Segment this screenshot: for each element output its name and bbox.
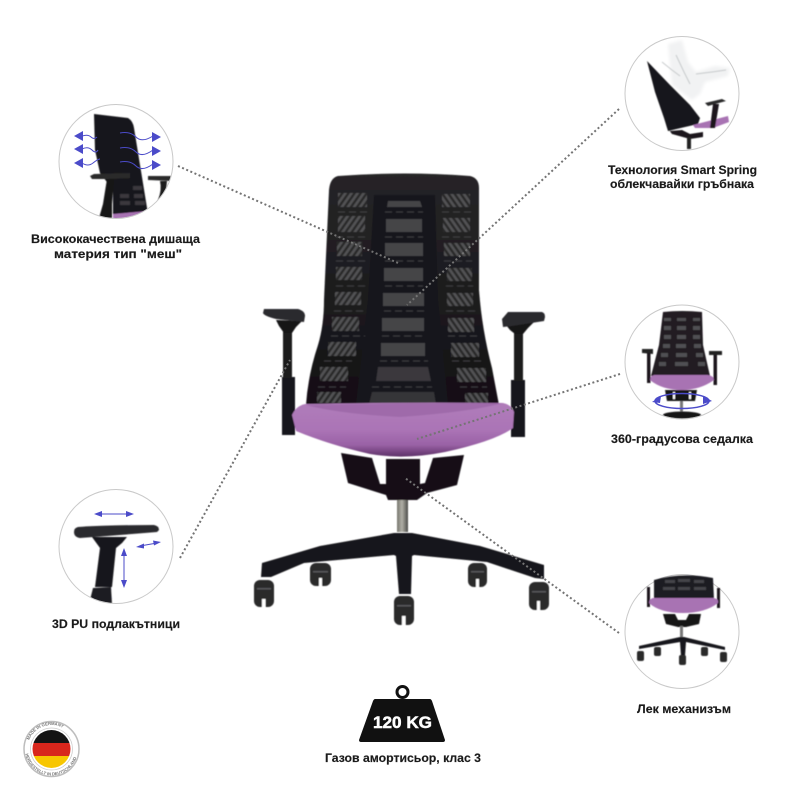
German flag xyxy=(32,730,71,768)
icon: weight xyxy=(359,686,445,742)
caption: Лек механизъм xyxy=(637,702,731,716)
badge text: MADE IN GERMANY xyxy=(26,722,64,740)
caption: Технология Smart Spring xyxy=(608,163,757,177)
leader: smart spring xyxy=(407,109,619,305)
dotted leader lines xyxy=(178,109,620,633)
star base xyxy=(261,533,544,594)
caption: 360-градусова седалка xyxy=(611,432,753,446)
backrest shell xyxy=(306,174,499,405)
chair base xyxy=(254,500,549,625)
adjustment arrows xyxy=(94,511,161,588)
right arm stem xyxy=(514,327,523,381)
right arm pad xyxy=(502,312,545,327)
circle frame xyxy=(59,104,173,218)
weight capacity xyxy=(325,686,481,765)
dark spine xyxy=(356,195,448,404)
caption: Висококачествена дишаща xyxy=(31,232,200,246)
caption xyxy=(608,163,757,191)
badge ring xyxy=(24,722,79,776)
main chair xyxy=(254,174,549,625)
mesh backrest xyxy=(306,174,499,405)
circle frame xyxy=(59,490,173,604)
caster slots xyxy=(262,578,540,625)
rotation arrow xyxy=(652,394,712,408)
panel: 3D armrests xyxy=(52,490,180,631)
caption: облекчавайки гръбнака xyxy=(610,177,754,191)
seat mechanism xyxy=(341,453,464,500)
left arm stem xyxy=(283,325,292,378)
caption: материя тип "меш" xyxy=(54,247,182,261)
mesh center windows xyxy=(369,201,436,404)
left arm pad xyxy=(263,309,305,322)
circle frame xyxy=(625,305,739,419)
leader: armrests xyxy=(180,360,290,558)
chair base illustration xyxy=(637,575,727,665)
caster highlights xyxy=(257,571,546,606)
panel: light mechanism xyxy=(625,574,739,716)
left arm lower post xyxy=(282,377,295,435)
arrowheads xyxy=(74,131,161,170)
weight value: 120 KG xyxy=(373,713,432,732)
mesh right windows xyxy=(442,194,488,403)
circle frame xyxy=(625,574,739,688)
leader: mechanism xyxy=(405,478,619,633)
leaning chair illustration xyxy=(647,40,730,149)
badge: made in Germany xyxy=(23,720,80,778)
airflow arrows xyxy=(82,132,153,169)
left arm support xyxy=(276,320,302,333)
panel: 360 seat xyxy=(611,305,753,446)
right arm support xyxy=(506,322,534,334)
armrest illustration xyxy=(74,525,159,604)
panel: smart spring xyxy=(608,36,757,191)
badge text xyxy=(26,722,76,776)
gas cylinder xyxy=(397,500,408,532)
caption xyxy=(31,232,200,261)
left armrest xyxy=(263,309,305,435)
seat front highlight xyxy=(306,403,503,417)
leader: mesh xyxy=(178,166,398,263)
chair back illustration xyxy=(90,114,172,220)
mesh left windows xyxy=(317,193,367,403)
panel: breathable mesh xyxy=(31,104,200,261)
circle frame xyxy=(625,36,739,150)
caption: Газов амортисьор, клас 3 xyxy=(325,751,481,765)
mesh seams xyxy=(318,212,487,387)
caption: 3D PU подлакътници xyxy=(52,617,180,631)
badge text: HERGESTELLT IN DEUTSCHLAND xyxy=(26,754,76,776)
purple seat xyxy=(292,403,514,457)
seat cushion xyxy=(292,403,514,457)
right armrest xyxy=(502,312,545,437)
casters xyxy=(254,563,549,625)
rotating chair illustration xyxy=(642,311,722,418)
badge inner ring xyxy=(30,728,72,770)
leader: 360 seat xyxy=(417,374,620,439)
right arm lower post xyxy=(511,380,525,437)
